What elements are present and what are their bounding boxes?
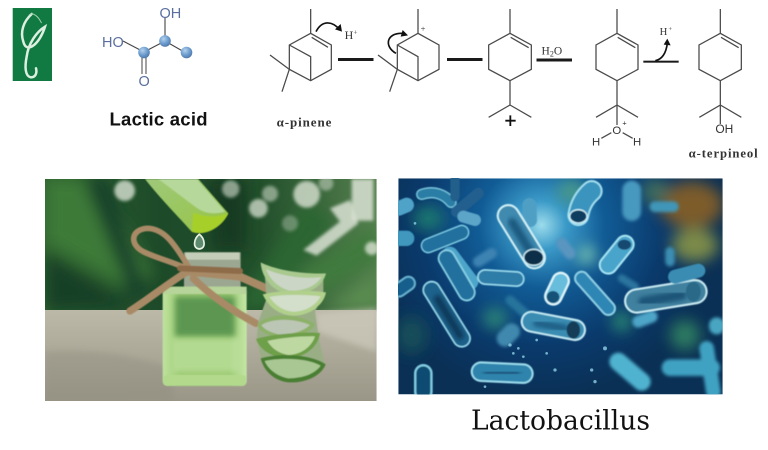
diagram: alpha-pinene structure: + — [353, 28, 357, 37]
reaction line 3 with water label: 2 — [550, 50, 554, 58]
diagram: protonated terpineol: H — [592, 136, 600, 148]
photo: aloe vera jar and slices — [45, 176, 378, 402]
diagram: alpha-pinene structure: α-pinene — [277, 114, 332, 129]
blurred palm leaves background — [45, 179, 377, 312]
reaction line 2 — [447, 58, 482, 61]
diagram: lactic acid molecule: O — [138, 74, 150, 90]
twine — [130, 228, 270, 323]
reaction line 4 with proton release arrow: H — [660, 27, 668, 38]
bokeh highlights — [114, 176, 378, 256]
diagram: alpha-terpineol structure: OH — [715, 122, 733, 136]
diagram: pinyl carbocation: + — [421, 23, 426, 33]
reaction line 4 with proton release arrow — [643, 26, 679, 63]
diagram: lactic acid molecule: HO — [102, 35, 124, 51]
diagram: pinyl carbocation — [378, 9, 439, 92]
diagram: protonated terpineol: + — [622, 118, 627, 127]
reaction line 1 — [338, 58, 374, 61]
diagram: alpha-pinene structure: H — [345, 28, 354, 42]
diagram: alpha-pinene structure — [270, 9, 357, 129]
reaction line 4 with proton release arrow: + — [668, 26, 672, 33]
caption: Lactobacillus: Lactobacillus — [471, 406, 650, 436]
reaction line 3 with water label — [536, 46, 572, 62]
aloe slices — [256, 262, 326, 382]
drop — [195, 234, 204, 249]
aloe leaf — [145, 179, 228, 233]
blurred colour bokeh — [397, 178, 723, 353]
diagram: alpha-terpineol structure: α-terpineol — [689, 146, 758, 160]
diagram: protonated terpineol: O — [612, 125, 621, 137]
logo: green leaf mark — [13, 8, 52, 81]
label: lactic acid: Lactic acid — [110, 108, 208, 130]
photo: lactobacillus bacteria — [397, 178, 723, 394]
reaction line 3 with water label: H — [542, 46, 550, 58]
blurred far bacteria — [478, 190, 717, 392]
ground — [45, 310, 377, 402]
diagram: lactic acid molecule — [102, 6, 192, 90]
reaction line 3 with water label: O — [554, 46, 562, 58]
diagram: alpha-terpineol structure — [689, 9, 758, 160]
diagram: protonated terpineol: H — [633, 136, 641, 148]
diagram: protonated terpineol — [592, 9, 641, 148]
floating particles — [414, 222, 607, 388]
diagram: lactic acid molecule: OH — [160, 6, 181, 22]
jar — [163, 252, 247, 386]
diagram: terpinyl cation — [489, 9, 531, 126]
sharp rods — [399, 180, 701, 392]
